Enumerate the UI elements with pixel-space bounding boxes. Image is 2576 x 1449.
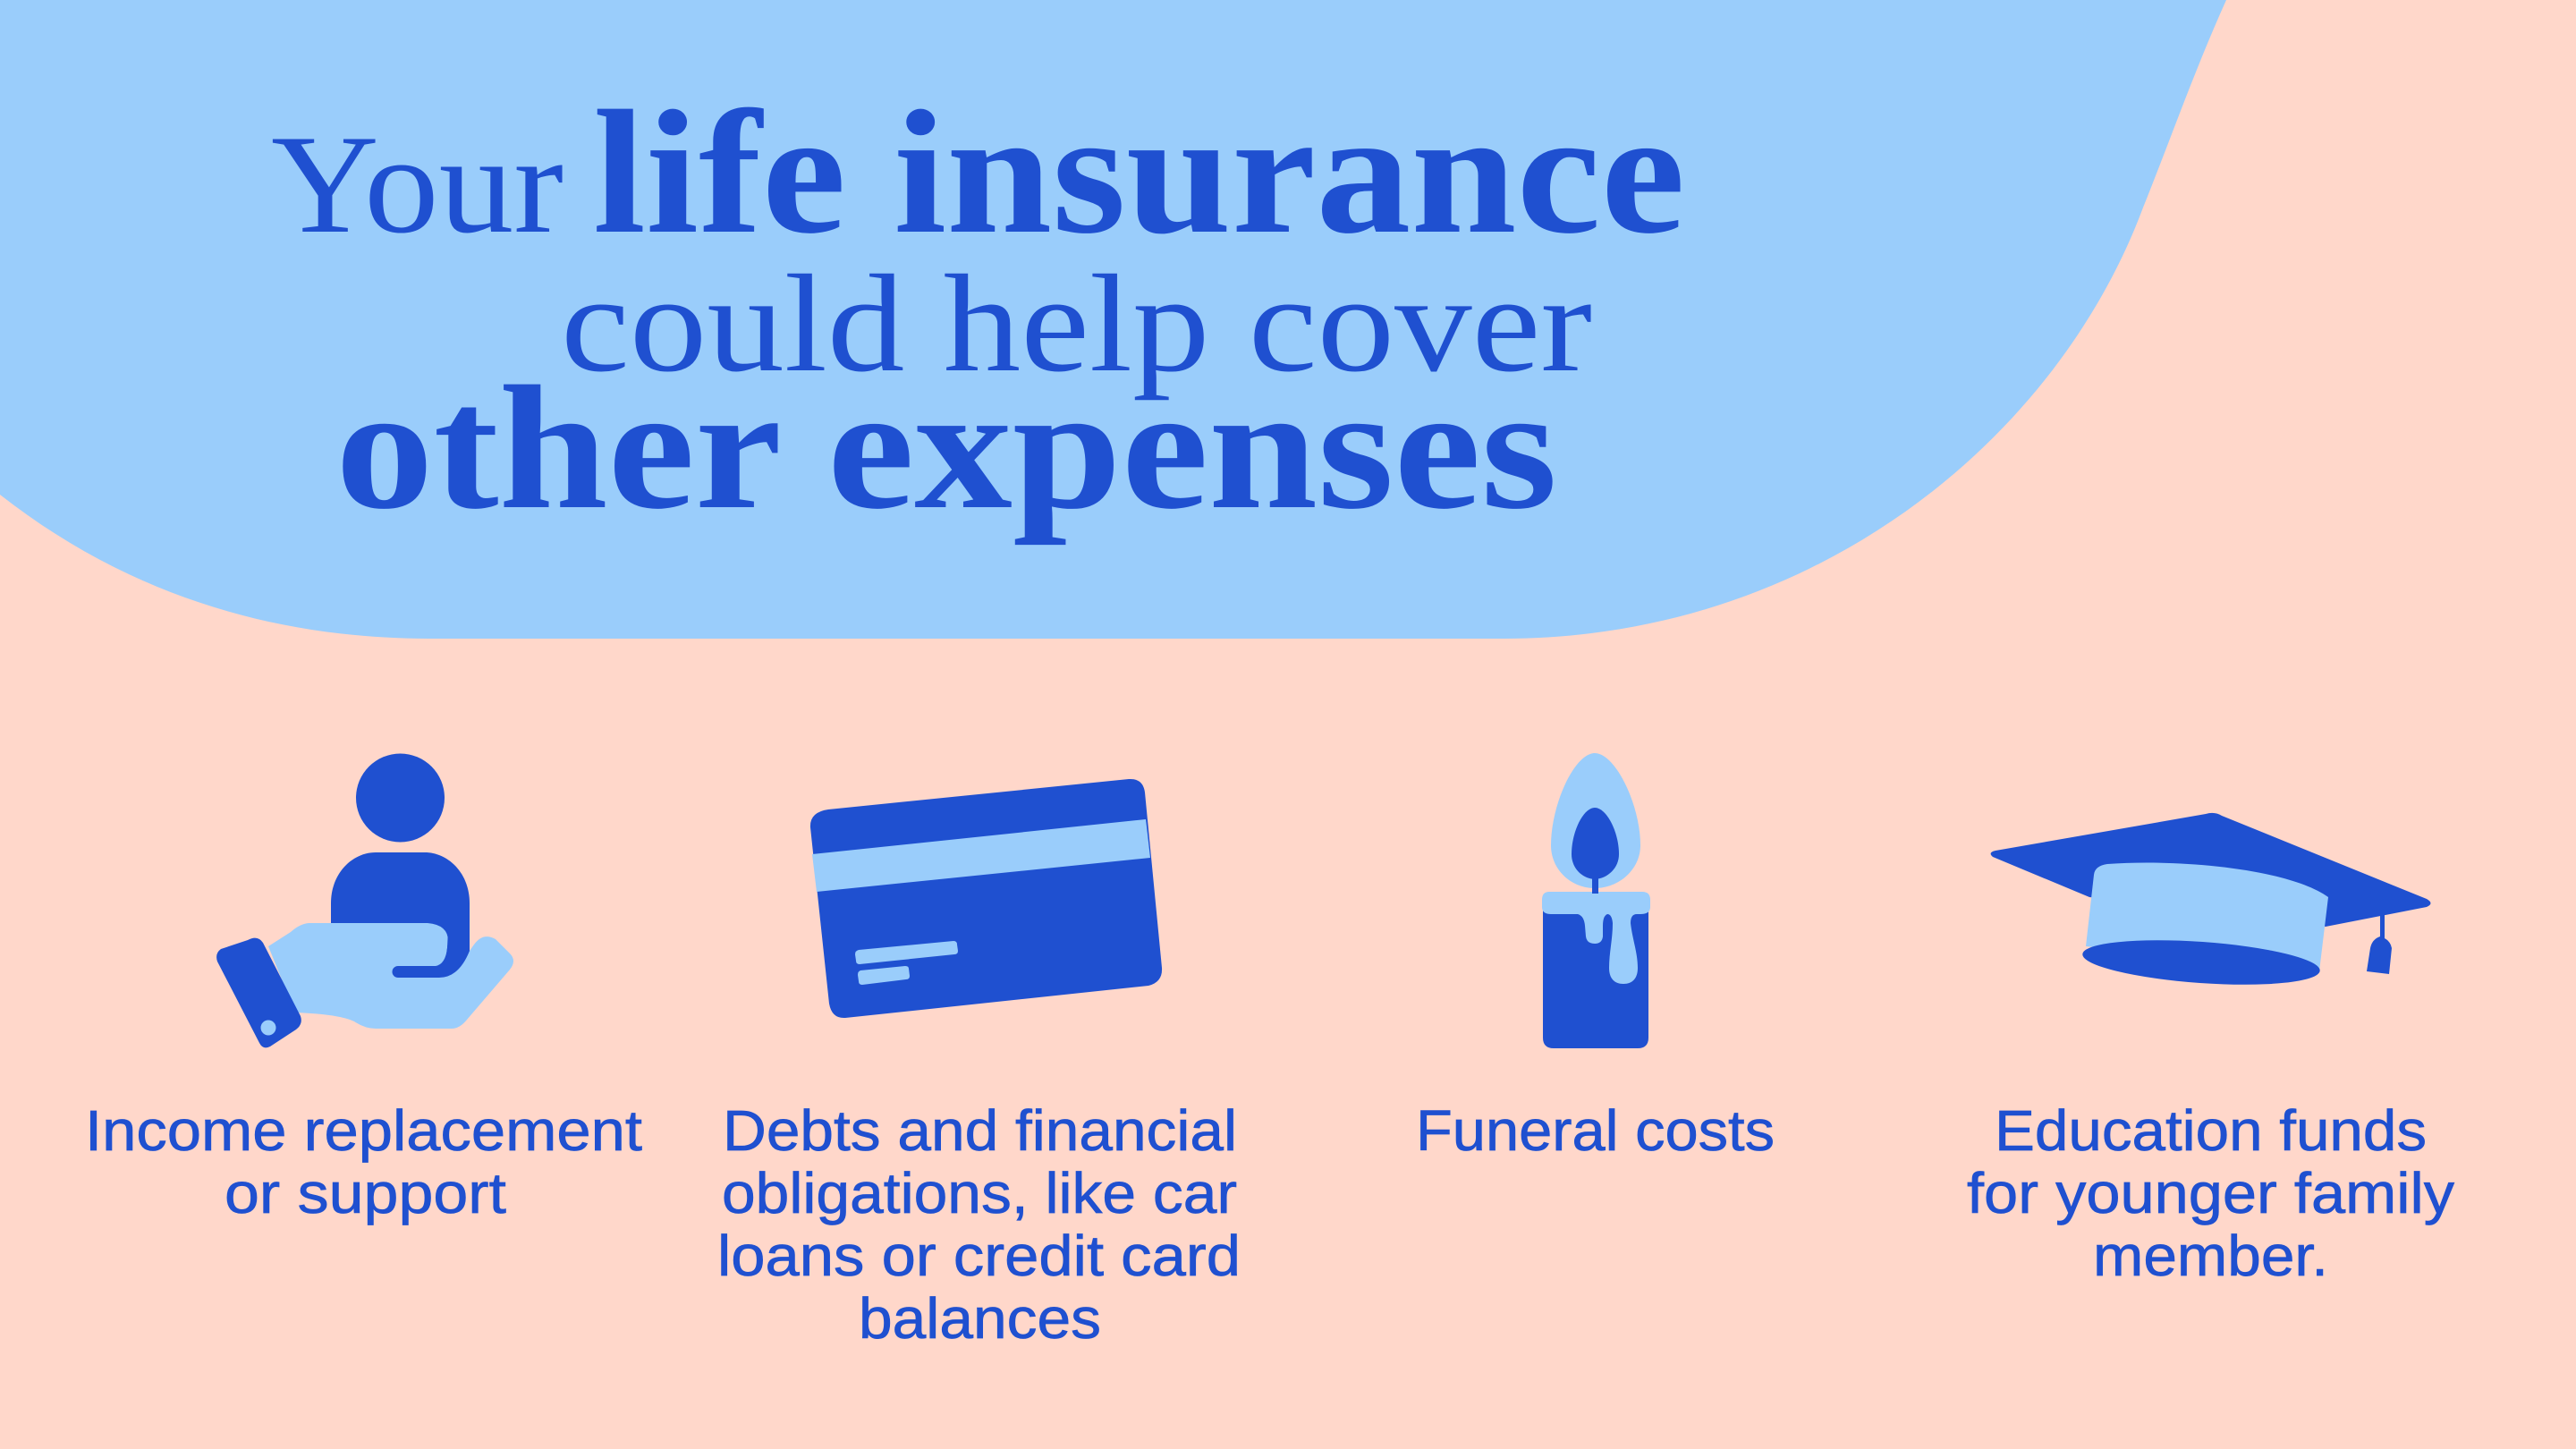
label: education: Education funds	[1995, 1098, 2427, 1163]
label: income: or support	[225, 1161, 506, 1225]
label: debts: balances	[859, 1286, 1101, 1351]
label: debts: obligations, like car	[722, 1161, 1237, 1225]
label: education	[1967, 1098, 2454, 1288]
icon: hand holding person	[216, 753, 513, 1047]
label: funeral: Funeral costs	[1416, 1098, 1775, 1163]
title: life insurance	[593, 74, 1685, 270]
label: education: member.	[2093, 1224, 2328, 1288]
label: income: Income replacement	[85, 1098, 642, 1163]
icon: candle	[1542, 753, 1650, 1048]
title: other expenses	[335, 350, 1557, 546]
label: debts: Debts and financial	[723, 1098, 1237, 1163]
label: debts: loans or credit card	[717, 1224, 1241, 1288]
label: income	[85, 1098, 642, 1225]
title: could help cover	[561, 246, 1592, 401]
label: education: for younger family	[1967, 1161, 2454, 1225]
title: Your	[271, 106, 564, 263]
header blob	[0, 0, 2226, 639]
icon: credit card	[810, 779, 1162, 1018]
title	[271, 74, 1685, 546]
label: debts	[717, 1098, 1241, 1351]
icon: graduation cap	[1991, 813, 2431, 991]
